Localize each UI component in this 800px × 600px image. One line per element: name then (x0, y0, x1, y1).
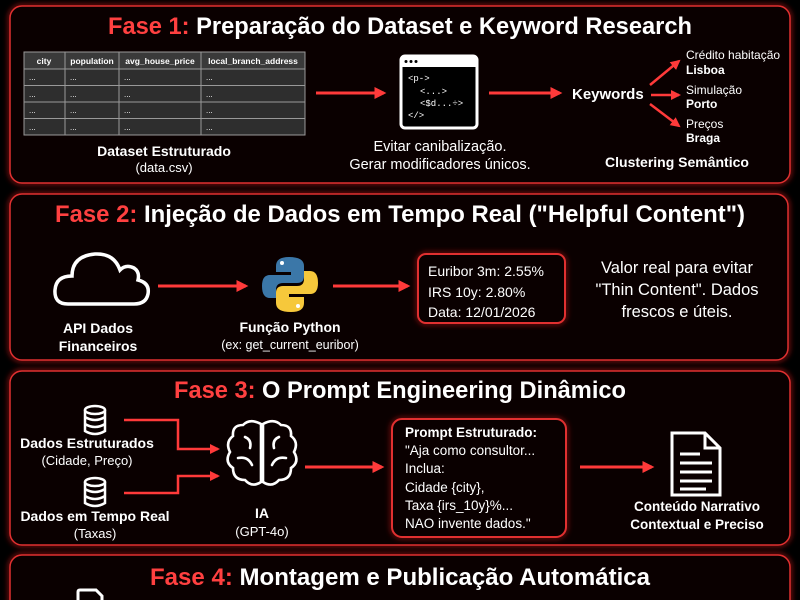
arrow: prompt to doc (580, 466, 652, 468)
table: dataset: ... (206, 90, 213, 99)
text: keyword list: Preços (686, 117, 723, 131)
arrows: data to ai (124, 420, 218, 493)
text: keyword list: Simulação (686, 83, 742, 97)
box: prompt: Inclua: (405, 461, 445, 476)
arrow: ai to prompt (305, 466, 382, 468)
text: dados estruturados (20, 435, 154, 468)
table: dataset: ... (29, 90, 36, 99)
box: data values: IRS 10y: 2.80% (428, 284, 525, 300)
table: dataset: ... (29, 73, 36, 82)
icon: python logo (262, 257, 318, 312)
text: evitar canibalizacao: Gerar modificadores únicos. (349, 157, 531, 173)
text: ia (235, 505, 289, 539)
text: dados tempo real: (Taxas) (74, 526, 116, 541)
box: data values (418, 254, 565, 323)
text: evitar canibalizacao: Evitar canibalização. (374, 139, 506, 155)
text: valor real: "Thin Content". Dados (595, 281, 759, 299)
icon: cloud (55, 254, 148, 304)
table: dataset: ... (206, 106, 213, 115)
table: dataset: local_branch_address (208, 56, 298, 66)
text: dados estruturados: (Cidade, Preço) (41, 453, 133, 468)
text: api label (59, 320, 137, 354)
icon: code window: <p-> (408, 74, 430, 84)
table: dataset: ... (29, 123, 36, 132)
text: dados tempo real: Dados em Tempo Real (20, 508, 170, 524)
text: conteudo narrativo (630, 499, 764, 532)
arrow: code to keywords (489, 92, 560, 94)
text: conteudo narrativo: Contextual e Preciso (630, 517, 764, 532)
table: dataset: ... (124, 90, 131, 99)
table: dataset: ... (124, 123, 131, 132)
text: evitar canibalizacao (349, 139, 531, 173)
table: dataset: avg_house_price (125, 56, 195, 66)
text: valor real (595, 259, 759, 321)
text: api label: Financeiros (59, 338, 137, 354)
table: dataset: city (37, 56, 52, 66)
text: ia: IA (255, 505, 269, 521)
table: dataset: ... (70, 123, 77, 132)
icon: brain (228, 421, 296, 485)
box: data values: Euribor 3m: 2.55% (428, 263, 544, 279)
table: dataset: ... (70, 73, 77, 82)
panel: fase 4 (10, 555, 790, 600)
box: data values: Data: 12/01/2026 (428, 304, 536, 320)
box: prompt: NAO invente dados." (405, 516, 531, 531)
arrows: keyword branches (650, 61, 679, 126)
icon: partial document (78, 590, 102, 600)
icon: database 1 (85, 406, 105, 434)
box: prompt: Cidade {city}, (405, 480, 485, 495)
arrow: api to python (158, 284, 246, 288)
text: keywords: Keywords (572, 86, 644, 103)
text: keyword list (686, 48, 780, 145)
table: dataset: ... (124, 106, 131, 115)
icon: code window: </> (408, 111, 424, 121)
text: keyword list: Braga (686, 131, 720, 145)
text: dataset label: Dataset Estruturado (97, 143, 231, 159)
heading: fase 2: Fase 2: Injeção de Dados em Tempo Real ("Helpful Content") (55, 201, 745, 228)
heading: fase 1: Fase 1: Preparação do Dataset e Keyword Research (108, 13, 692, 40)
text: dados estruturados: Dados Estruturados (20, 435, 154, 451)
table: dataset: ... (124, 73, 131, 82)
panel: fase 3 (10, 371, 790, 545)
panel: fase 2 (10, 194, 788, 360)
text: keyword list: Porto (686, 97, 717, 111)
icon: code window: <$d...÷> (420, 99, 463, 109)
text: valor real: Valor real para evitar (601, 259, 753, 277)
text: keyword list: Lisboa (686, 63, 725, 77)
box: prompt: "Aja como consultor... (405, 443, 535, 458)
table: dataset: ... (29, 106, 36, 115)
text: ia: (GPT-4o) (235, 524, 289, 539)
box: prompt: Prompt Estruturado: (405, 425, 537, 440)
table: dataset: ... (70, 90, 77, 99)
text: keyword list: Crédito habitação (686, 48, 780, 62)
table: dataset: ... (206, 73, 213, 82)
arrow: table to code (316, 92, 384, 94)
text: valor real: frescos e úteis. (622, 303, 732, 321)
box: prompt: Taxa {irs_10y}%... (405, 498, 513, 513)
arrow: python to box (333, 284, 408, 288)
text: funcao python: Função Python (239, 319, 341, 335)
table: dataset: population (70, 56, 114, 66)
table: dataset: ... (206, 123, 213, 132)
table: dataset: ... (70, 106, 77, 115)
text: clustering: Clustering Semântico (605, 154, 749, 170)
text: funcao python (221, 319, 359, 352)
heading: fase 4: Fase 4: Montagem e Publicação Automática (150, 564, 651, 591)
heading: fase 3: Fase 3: O Prompt Engineering Dinâmico (174, 377, 626, 404)
icon: document (672, 433, 720, 495)
icon: code window (401, 56, 477, 128)
icon: code window: <...> (420, 87, 447, 97)
panel: fase 1 (10, 6, 790, 183)
text: api label: API Dados (63, 320, 133, 336)
text: conteudo narrativo: Conteúdo Narrativo (634, 499, 760, 514)
table: dataset (24, 52, 305, 135)
icon: database 2 (85, 478, 105, 506)
text: funcao python: (ex: get_current_euribor) (221, 338, 359, 352)
text: dataset label (97, 143, 231, 175)
box: prompt (392, 419, 566, 537)
text: dados tempo real (20, 508, 170, 541)
text: dataset label: (data.csv) (135, 160, 193, 175)
